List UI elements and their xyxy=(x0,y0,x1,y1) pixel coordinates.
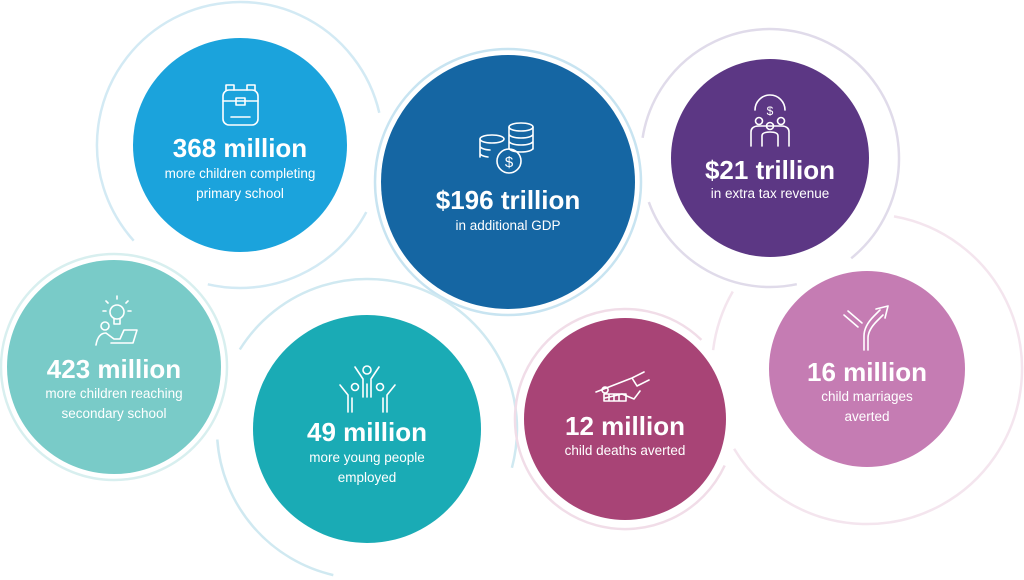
ring: tax revenue xyxy=(643,29,899,287)
panel: 368 million primary school xyxy=(133,38,347,252)
panel: 196 trillion GDP xyxy=(381,55,635,309)
panel: 423 million secondary school: more children reaching xyxy=(45,386,183,401)
ring: child deaths xyxy=(515,309,725,529)
panel: 423 million secondary school: secondary school xyxy=(61,406,167,421)
icon: people with dollar: $ xyxy=(767,104,774,118)
icon: diverging arrow xyxy=(844,306,888,350)
stat text: 49 million xyxy=(307,417,427,447)
ring: primary school xyxy=(97,2,379,288)
panel: 21 trillion tax revenue: in extra tax revenue xyxy=(711,186,829,201)
panel: 12 million child deaths xyxy=(524,318,726,520)
panel: 423 million secondary school xyxy=(7,260,221,474)
panel: 49 million employed: more young people xyxy=(309,450,425,465)
ring: employed xyxy=(217,279,517,575)
panel: 368 million primary school: more children completing xyxy=(165,166,315,181)
stat text: 423 million xyxy=(47,354,181,384)
panel: 16 million child marriages: child marriages xyxy=(821,389,913,404)
icon: lightbulb learner xyxy=(96,296,137,345)
panel: 368 million primary school: primary school xyxy=(196,186,284,201)
icon: people with dollar xyxy=(751,95,789,146)
panel: 49 million employed: employed xyxy=(338,470,396,485)
stat text: 12 million xyxy=(565,411,685,441)
icon: coins xyxy=(480,123,533,173)
panel: 16 million child marriages: averted xyxy=(844,409,890,424)
stat text: 16 million xyxy=(807,357,927,387)
panel: 16 million child marriages xyxy=(769,271,965,467)
panel: 12 million child deaths: child deaths averted xyxy=(565,443,685,458)
stat text: 368 million xyxy=(173,133,307,163)
icon: coins: $ xyxy=(505,154,514,171)
panel: 196 trillion GDP: in additional GDP xyxy=(455,218,561,233)
stat text: $21 trillion xyxy=(705,155,835,185)
panel: 21 trillion tax revenue xyxy=(671,59,869,257)
icon: handshake xyxy=(596,372,649,401)
icon: cheering people xyxy=(340,366,395,412)
ring: secondary school xyxy=(1,254,227,480)
ring: GDP xyxy=(375,49,641,315)
stat text: $196 trillion xyxy=(436,185,580,215)
icon: backpack xyxy=(223,85,258,125)
panel: 49 million employed xyxy=(253,315,481,543)
ring: child marriages xyxy=(713,216,1022,524)
